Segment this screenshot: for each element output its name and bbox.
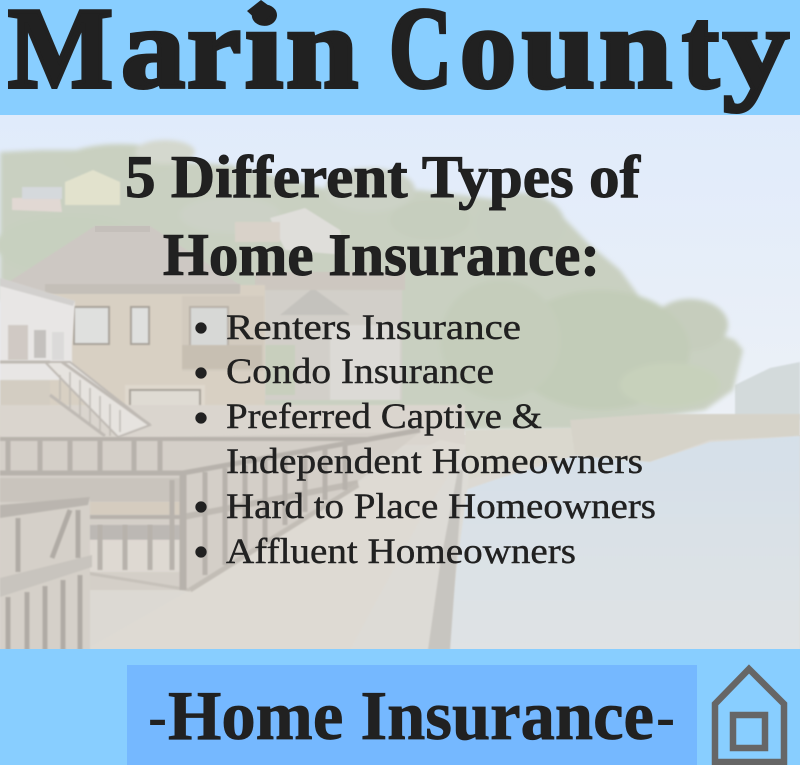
subheading xyxy=(125,144,641,288)
heading: Marin County xyxy=(8,0,789,113)
foreground railing xyxy=(0,497,92,650)
boardwalk floor xyxy=(85,440,465,650)
list item: Hard to Place: Hard to Place Homeowners xyxy=(226,486,656,526)
insurance type list xyxy=(196,307,656,571)
subheading: 5 Different Types of xyxy=(125,144,641,210)
lower deck structures xyxy=(0,405,465,445)
footer title: - xyxy=(148,678,167,755)
footer title panel xyxy=(127,665,697,765)
distant hill xyxy=(735,362,800,420)
main house wall xyxy=(45,285,265,410)
list item: Affluent: Affluent Homeowners xyxy=(226,531,576,571)
concrete sea wall xyxy=(350,450,470,650)
background photo: Marin waterfront xyxy=(0,115,800,650)
icon: house xyxy=(715,669,784,762)
boardwalk railings xyxy=(0,430,420,590)
house bay xyxy=(125,296,264,417)
water xyxy=(440,436,800,650)
list item: Preferred Captive and Independent: Independent Homeowners xyxy=(226,441,643,481)
list item: Preferred Captive and Independent xyxy=(196,396,643,481)
shoreline rocks xyxy=(570,414,800,462)
white building left xyxy=(0,278,75,440)
photo base and sky xyxy=(0,115,800,650)
tree covered hillside xyxy=(0,140,743,430)
seawall and shore xyxy=(465,428,575,480)
staircase xyxy=(0,362,150,437)
footer title: Home Insurance xyxy=(168,678,654,755)
hillside houses xyxy=(12,170,405,400)
footer title: - xyxy=(656,678,675,755)
list item: Condo: Condo Insurance xyxy=(226,351,494,391)
house windows xyxy=(74,307,200,416)
header band xyxy=(0,0,800,115)
footer band xyxy=(0,649,800,765)
icon: diamond dot of the i xyxy=(247,0,276,24)
list item: Renters: Renters Insurance xyxy=(226,307,521,347)
list item: Preferred Captive and Independent: Preferred Captive & xyxy=(226,396,542,436)
subheading: Home Insurance: xyxy=(163,222,600,288)
main house roof xyxy=(4,226,240,292)
